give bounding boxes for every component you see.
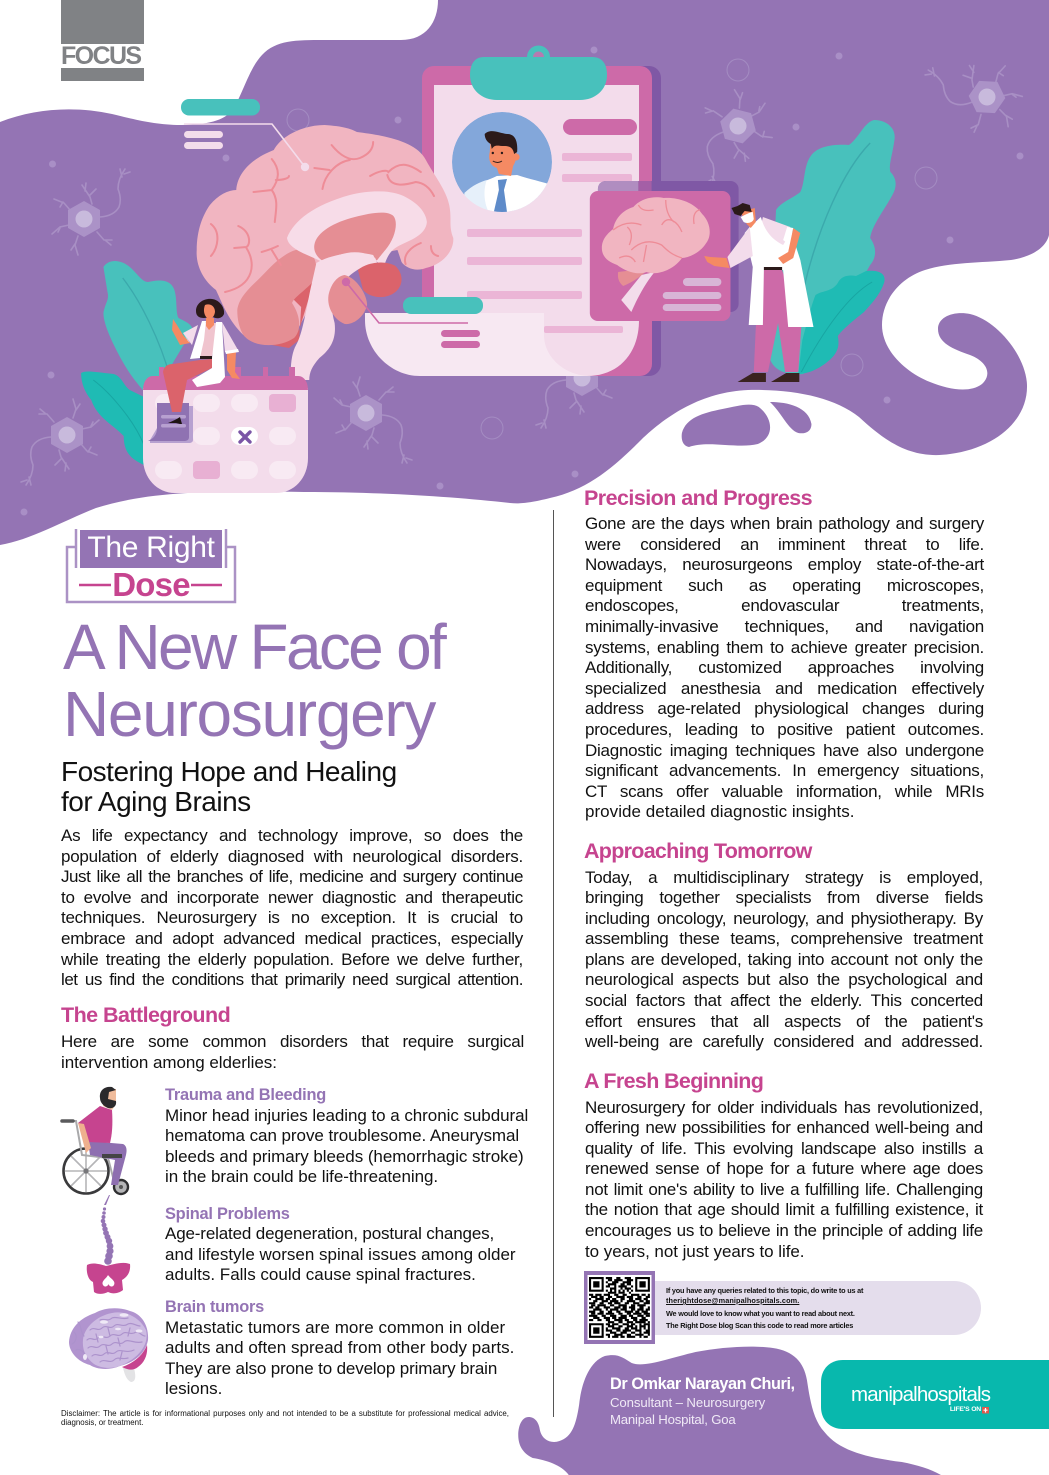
battleground intro: intervention among elderlies: — [61, 1053, 277, 1072]
subtitle: for Aging Brains — [61, 786, 251, 817]
approaching paragraph: including oncology, neurology, and physiotherapy. By — [585, 909, 983, 928]
approaching paragraph: Today, a multidisciplinary strategy is employed, — [585, 868, 983, 886]
icon: wheelchair patient — [62, 1087, 128, 1194]
author credit: Manipal Hospital, Goa — [610, 1412, 736, 1427]
focus tag — [61, 0, 144, 81]
woman seated on calendar — [163, 299, 240, 424]
item: trauma and bleeding: bleeds and primary bleeds (hemorrhagic stroke) — [165, 1147, 524, 1166]
brain stem — [291, 253, 377, 380]
purple island shapes — [682, 402, 811, 447]
approaching paragraph: plans are developed, taking into account not only the — [585, 950, 983, 969]
logo frame: The Right Dose — [67, 529, 235, 602]
callout line with bars bottom — [342, 278, 483, 348]
intro paragraph: while treating the elderly population. Before we delve further, — [61, 950, 523, 969]
fresh beginning paragraph — [585, 1098, 984, 1261]
inner pink mass — [314, 213, 396, 262]
main title: A New Face of — [63, 611, 444, 683]
approaching paragraph: bringing together specialists from diverse fields — [585, 888, 983, 907]
battleground intro: Here are some common disorders that require surgical — [61, 1032, 524, 1051]
logo text: The Right Dose: Dose — [112, 566, 190, 603]
precision paragraph: CT scans offer valuable information, while MRIs — [585, 782, 984, 801]
approaching paragraph: assembling these teams, comprehensive treatment — [585, 929, 983, 948]
item: brain tumors: Metastatic tumors are more common in older — [165, 1318, 505, 1337]
item: spinal problems: Age-related degeneration, postural changes, — [165, 1224, 494, 1243]
fresh beginning paragraph: encourages us to believe in the principle of adding life — [585, 1221, 983, 1240]
intro paragraph: techniques. Neurosurgery is no exception. It is crucial to — [61, 908, 523, 927]
subtitle — [61, 756, 397, 817]
item: trauma and bleeding — [165, 1086, 528, 1186]
heading: Approaching Tomorrow: Approaching Tomorrow — [584, 839, 812, 863]
item: brain tumors: lesions. — [165, 1379, 222, 1398]
calendar — [143, 367, 308, 493]
teal logo card — [821, 1360, 1049, 1429]
logo text: The Right Dose: The Right — [87, 531, 215, 564]
red cross badge — [982, 1407, 989, 1414]
focus tag: FOCUS — [61, 42, 141, 70]
disclaimer: diagnosis, or treatment. — [61, 1418, 143, 1427]
thalamus and pons — [358, 263, 402, 297]
heading: Precision and Progress: Precision and Progress — [584, 486, 812, 510]
logo text: The Right Dose — [87, 531, 215, 603]
approaching paragraph: well-being are carefully considered and addressed. — [585, 1032, 983, 1051]
precision paragraph — [585, 514, 984, 821]
QR code — [584, 1271, 655, 1344]
corpus callosum light band — [287, 191, 427, 270]
precision paragraph: address age-related physiological changes during — [585, 699, 984, 718]
contact text — [666, 1286, 864, 1330]
contact text: We would love to know what you want to read about next. — [666, 1309, 855, 1318]
clipboard clip — [470, 48, 607, 100]
precision paragraph: specialized anesthesia and medication effectively — [585, 679, 984, 698]
decorative dots and rings — [20, 46, 1024, 516]
callout line with bars top — [181, 99, 309, 171]
intro paragraph: population of elderly diagnosed with neurological disorders. — [61, 847, 523, 866]
intro paragraph: embrace and adopt advanced medical practices, especially — [61, 929, 523, 948]
leaves left — [81, 261, 193, 465]
precision paragraph: minimally-invasive techniques, and navigation — [585, 617, 984, 636]
big brain cross-section — [197, 125, 453, 380]
purple background blob — [0, 0, 1049, 545]
precision paragraph: significant advancements. In emergency situations, — [585, 761, 984, 780]
manipal hospitals wordmark: LIFE'S ON — [950, 1406, 981, 1413]
precision paragraph: Gone are the days when brain pathology and surgery — [585, 514, 984, 533]
fresh beginning paragraph: offering new possibilities for enhanced well-being and — [585, 1118, 983, 1137]
precision paragraph: systems, enabling them to achieve greater precision. — [585, 638, 984, 657]
column divider — [552, 510, 554, 1417]
icon: purple brain — [69, 1308, 148, 1382]
disclaimer: Disclaimer: The article is for informational purposes only and not intended to be a substitute for professional medical advice, — [61, 1409, 509, 1418]
fresh beginning paragraph: the notion that age should limit a fulfilling existence, it — [585, 1200, 983, 1219]
fresh beginning paragraph: not limit one's ability to live a fulfilling life. Challenging — [585, 1180, 983, 1199]
portrait of doctor — [452, 112, 559, 215]
precision paragraph: procedures, leading to positive patient outcomes. — [585, 720, 984, 739]
item: spinal problems — [165, 1205, 516, 1284]
item: brain tumors: Brain tumors — [165, 1298, 264, 1316]
subtitle: Fostering Hope and Healing — [61, 756, 397, 787]
note card — [148, 403, 193, 443]
precision paragraph: were considered an imminent threat to life. — [585, 535, 984, 554]
neurons — [21, 38, 1032, 485]
clipboard — [365, 48, 661, 376]
brain x-ray card — [590, 181, 739, 321]
item: trauma and bleeding: in the brain could be life-threatening. — [165, 1167, 438, 1186]
approaching paragraph: effort ensures that all aspects of the patient's — [585, 1012, 983, 1031]
item: trauma and bleeding: hematoma can prove troublesome. Aneurysmal — [165, 1126, 519, 1145]
icon: spine and pelvis — [87, 1195, 130, 1294]
intro paragraph: Just like all the branches of life, medicine and surgery continue — [61, 867, 523, 886]
contact text: The Right Dose blog Scan this code to read more articles — [666, 1321, 853, 1330]
main title — [63, 611, 447, 750]
author credit: Consultant – Neurosurgery — [610, 1395, 765, 1410]
author credit: Dr Omkar Narayan Churi, — [610, 1375, 795, 1393]
intro paragraph: to evolve and incorporate newer diagnostic and therapeutic — [61, 888, 523, 907]
intro paragraph: let us find the conditions that primarily need surgical attention. — [61, 970, 523, 989]
fresh beginning paragraph: to years, not just years to life. — [585, 1242, 804, 1261]
item: brain tumors: adults and often spread from other body parts. — [165, 1338, 514, 1357]
approaching paragraph: neurological aspects but also the psychological and — [585, 970, 983, 989]
approaching paragraph — [585, 868, 984, 1051]
manipal hospitals wordmark: manipalhospitals — [851, 1383, 990, 1406]
item: trauma and bleeding: Trauma and Bleeding — [165, 1086, 326, 1104]
precision paragraph: provide detailed diagnostic insights. — [585, 802, 854, 821]
precision paragraph: Diagnostic imaging techniques have also undergone — [585, 741, 984, 760]
battleground intro — [61, 1032, 524, 1072]
author credit — [610, 1375, 795, 1427]
item: brain tumors: They are also prone to develop primary brain — [165, 1359, 497, 1378]
contact text: If you have any queries related to this topic, do write to us at — [666, 1286, 863, 1295]
leaves right — [769, 120, 896, 374]
precision paragraph: endoscopes, endovascular treatments, — [585, 596, 984, 615]
item: trauma and bleeding: Minor head injuries leading to a chronic subdural — [165, 1106, 528, 1125]
author blob — [518, 1347, 941, 1475]
fresh beginning paragraph: renewed sense of hope for a future where age does — [585, 1159, 983, 1178]
precision paragraph: equipment such as operating microscopes, — [585, 576, 984, 595]
item: brain tumors — [165, 1298, 514, 1398]
item: spinal problems: adults. Falls could cause spinal fractures. — [165, 1265, 476, 1284]
item: spinal problems: Spinal Problems — [165, 1205, 290, 1223]
precision paragraph: Additionally, customized approaches involving — [585, 658, 984, 677]
heading: A Fresh Beginning: A Fresh Beginning — [584, 1069, 763, 1093]
fresh beginning paragraph: quality of life. This evolving landscape also instills a — [585, 1139, 983, 1158]
heading: The Battleground: The Battleground — [61, 1003, 230, 1027]
small brain — [602, 197, 710, 312]
fresh beginning paragraph: Neurosurgery for older individuals has revolutionized, — [585, 1098, 983, 1116]
doctor with coat — [704, 203, 813, 382]
approaching paragraph: social factors that affect the elderly. This concerted — [585, 991, 983, 1010]
contact text: therightdose@manipalhospitals.com. — [666, 1296, 799, 1305]
precision paragraph: Nowadays, neurosurgeons employ state-of-the-art — [585, 555, 984, 574]
contact pill — [655, 1281, 981, 1335]
disclaimer — [61, 1409, 509, 1427]
cerebellum — [272, 270, 317, 348]
item: spinal problems: and lifestyle worsen spinal issues among older — [165, 1245, 516, 1264]
intro paragraph: As life expectancy and technology improve, so does the — [61, 826, 523, 845]
main title: Neurosurgery — [63, 678, 435, 750]
intro paragraph — [61, 826, 524, 989]
